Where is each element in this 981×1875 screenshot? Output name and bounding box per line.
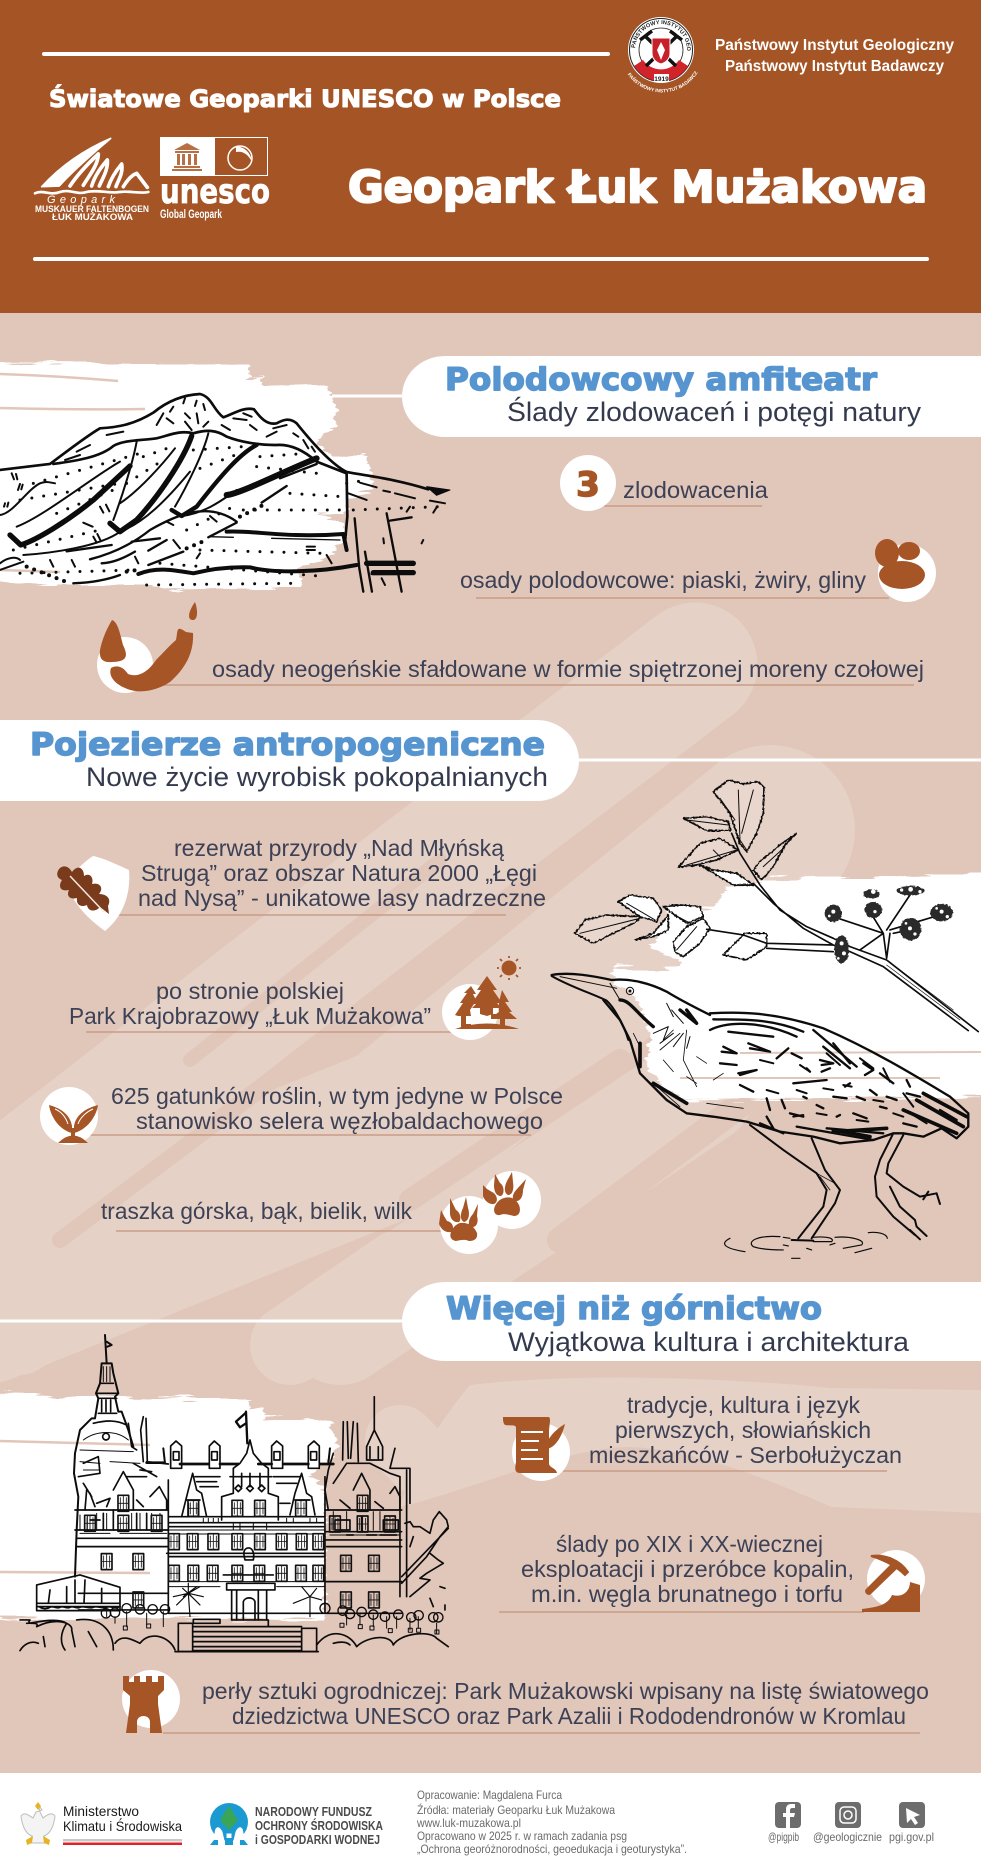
logo: UNESCO Global Geopark: unesco [160,172,270,212]
item: plant species: stanowisko selera węzłobaldachowego [136,1108,543,1134]
logo: UNESCO Global Geopark [160,137,270,221]
panel: anthropogenic lake district [0,720,579,1254]
social labels: @pigpib [768,1830,799,1844]
credits: Źródła: materiały Geoparku Łuk Mużakowa [417,1802,615,1817]
item: garden art: perły sztuki ogrodniczej: Park Mużakowski wpisany na listę światowego [202,1678,929,1704]
item: landscape park: Park Krajobrazowy „Łuk Mużakowa” [69,1003,431,1029]
credits [416,1788,687,1856]
item: nature reserve: Strugą” oraz obszar Natura 2000 „Łęgi [141,860,537,886]
illustration: glacial moraine cross-section [0,394,450,592]
heading pill [402,356,981,437]
heading: Pojezierze antropogeniczne [30,727,545,763]
connector rule 1 [332,394,404,398]
credits: www.luk-muzakowa.pl [416,1816,521,1830]
item: plant species: 625 gatunków roślin, w tym jedyne w Polsce [111,1083,563,1109]
logo: Geopark Muskauer Faltenbogen: Geopark [47,194,116,206]
connector rule 2 [579,758,981,762]
icon: pickaxe and ground [862,1556,920,1612]
heading: Polodowcowy amfiteatr [445,362,878,398]
item: three glaciations: zlodowacenia [623,477,768,503]
item: Sorbian culture: pierwszych, słowiańskich [615,1417,871,1443]
logo: Geopark Muskauer Faltenbogen [35,138,149,222]
heading: Więcej niż górnictwo [446,1291,822,1327]
item: glacial deposits: osady polodowcowe: piaski, żwiry, gliny [460,567,866,593]
item: mining traces: m.in. węgla brunatnego i torfu [531,1581,843,1607]
item: garden art [122,1670,929,1733]
item: Sorbian culture: tradycje, kultura i język [627,1392,860,1418]
series title: Światowe Geoparki UNESCO w Polsce [49,83,561,113]
subheading: Nowe życie wyrobisk pokopalnianych [86,762,548,792]
credits: „Ochrona georóżnorodności, geoedukacja i geoturystyka”. [417,1842,687,1856]
item: three glaciations: 3 [576,465,600,505]
illustration: Muskau castle [20,1335,448,1652]
icon: Facebook [775,1802,801,1828]
logo: National Fund for Environmental Protection [210,1803,383,1847]
logo: National Fund for Environmental Protection: NARODOWY FUNDUSZ [255,1804,372,1819]
item: landscape park: po stronie polskiej [156,978,344,1004]
panel: glacial amphitheatre [97,356,981,693]
illustration: plant sprig [575,780,978,1032]
heading pill [0,720,579,801]
icon: Instagram [835,1802,861,1828]
item: folded Neogene deposits [97,602,924,693]
item: Sorbian culture: mieszkańców - Serbołużyczan [589,1442,902,1468]
logo: National Fund for Environmental Protection: i GOSPODARKI WODNEJ [255,1832,380,1847]
item: folded Neogene deposits: osady neogeńskie sfałdowane w formie spiętrzonej moreny czołowej [212,656,924,682]
logo: Geopark Muskauer Faltenbogen: MUSKAUER FALTENBOGEN [35,204,149,214]
subheading: Ślady zlodowaceń i potęgi natury [507,395,922,427]
brush stroke: glacial section [0,362,372,590]
logo: Geopark Muskauer Faltenbogen: ŁUK MUŻAKOWA [52,212,134,222]
icon: shield with oak leaf [57,856,129,931]
background swooshes [0,665,981,1513]
main title: Geopark Łuk Mużakowa [348,162,927,213]
item: animals: traszka górska, bąk, bielik, wilk [101,1198,412,1224]
item: plant species [40,1083,563,1145]
institute name: Państwowy Instytut Badawczy [725,58,944,75]
institute name [715,37,954,75]
logo: UNESCO Global Geopark: Global Geopark [160,207,222,221]
icon: paw print lower [439,1197,478,1241]
item: animals [101,1171,541,1254]
connector rule 3 [0,1320,404,1322]
item: nature reserve: rezerwat przyrody „Nad Młyńską [174,835,504,861]
darker stripes [60,860,760,1240]
credits: Opracowanie: Magdalena Furca [417,1788,562,1802]
item: nature reserve: nad Nysą” - unikatowe lasy nadrzeczne [138,885,546,911]
icon: forest and sun [455,956,521,1029]
panel: more than mining [122,1282,981,1733]
item: Sorbian culture [503,1392,902,1481]
social labels [768,1830,934,1844]
header rules [35,54,927,259]
brush stroke: bittern section [612,874,981,1100]
item: mining traces [499,1531,925,1612]
social labels: pgi.gov.pl [889,1830,934,1844]
header band [0,0,981,313]
logo: PIG seal [628,17,698,92]
item: landscape park [69,956,521,1040]
icon: website cursor [899,1802,925,1828]
illustration: bittern bird [552,974,968,1258]
logo: Ministry of Climate and Environment [21,1802,182,1845]
icon: paw print upper [483,1172,526,1216]
icon: folded layers [100,602,197,691]
item: nature reserve [57,835,546,931]
footer [0,1773,981,1875]
item: mining traces: eksploatacji i przeróbce kopalin, [521,1556,854,1582]
item: three glaciations [560,455,768,511]
social labels: @geologicznie [813,1830,882,1844]
logo: National Fund for Environmental Protection: OCHRONY ŚRODOWISKA [255,1818,383,1833]
icon: tower [123,1676,164,1733]
logo: Ministry of Climate and Environment: Klimatu i Środowiska [63,1817,182,1834]
logo: PIG seal: 1919 [654,76,669,83]
logo: Ministry of Climate and Environment: Ministerstwo [63,1803,139,1819]
brush stroke: castle section [0,1394,337,1620]
institute name: Państwowy Instytut Geologiczny [715,37,954,54]
heading pill [402,1282,981,1361]
item: glacial deposits [460,539,936,602]
icon: scroll and quill [503,1417,565,1473]
item: garden art: dziedzictwa UNESCO oraz Park Azalii i Rododendronów w Kromlau [232,1703,906,1729]
icon: pebbles [875,539,925,589]
subheading: Wyjątkowa kultura i architektura [508,1327,910,1357]
icon: sprout [49,1105,98,1143]
item: mining traces: ślady po XIX i XX-wiecznej [556,1531,823,1557]
credits: Opracowano w 2025 r. w ramach zadania psg [417,1829,627,1843]
